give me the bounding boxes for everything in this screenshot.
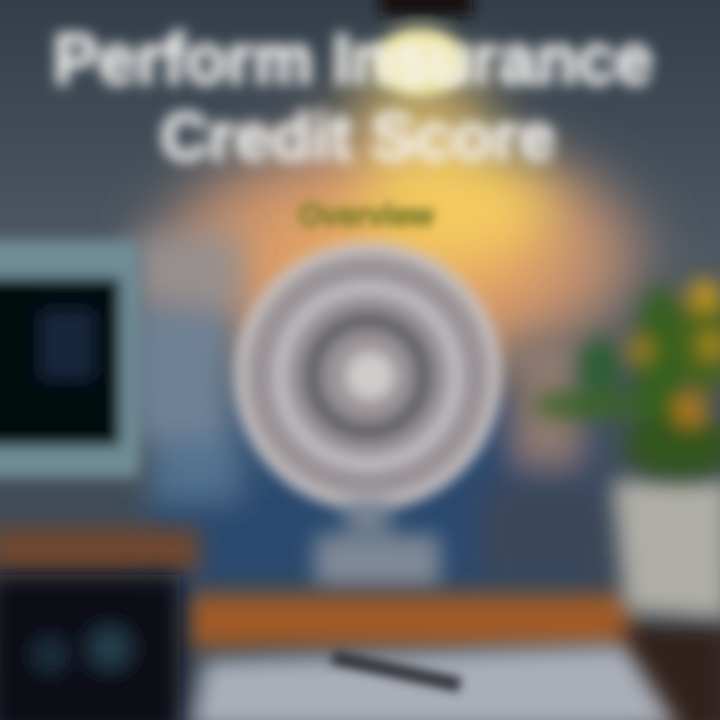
outer ring — [240, 248, 496, 504]
title — [53, 20, 653, 175]
flowers — [628, 338, 652, 362]
gauge stand — [315, 500, 440, 587]
device body — [0, 575, 180, 720]
circular gauge — [238, 246, 498, 506]
screen highlights — [40, 310, 95, 380]
gauge disc — [238, 246, 498, 506]
inner ring — [312, 320, 424, 432]
warm lamp glow — [135, 60, 665, 390]
blue backdrop panel — [130, 235, 620, 590]
pen — [330, 650, 462, 692]
lamp shade — [380, 0, 472, 16]
subtitle: Overview — [298, 197, 434, 233]
device buttons — [34, 639, 66, 671]
dark device — [0, 575, 180, 720]
title line 1: Perform Insurance — [53, 20, 653, 100]
lamp — [374, 0, 472, 96]
wooden desk — [190, 595, 720, 720]
light bulb — [374, 28, 466, 96]
leaves — [636, 285, 684, 455]
left desk shelf — [0, 528, 200, 572]
middle ring — [280, 288, 456, 464]
title line 2: Credit Score — [160, 99, 556, 175]
plant — [532, 279, 720, 477]
plant pot — [612, 480, 720, 620]
monitor screen — [0, 278, 120, 446]
center dot — [346, 352, 394, 400]
paper sheet — [190, 645, 680, 720]
monitor frame — [0, 240, 140, 478]
monitor — [0, 240, 140, 478]
